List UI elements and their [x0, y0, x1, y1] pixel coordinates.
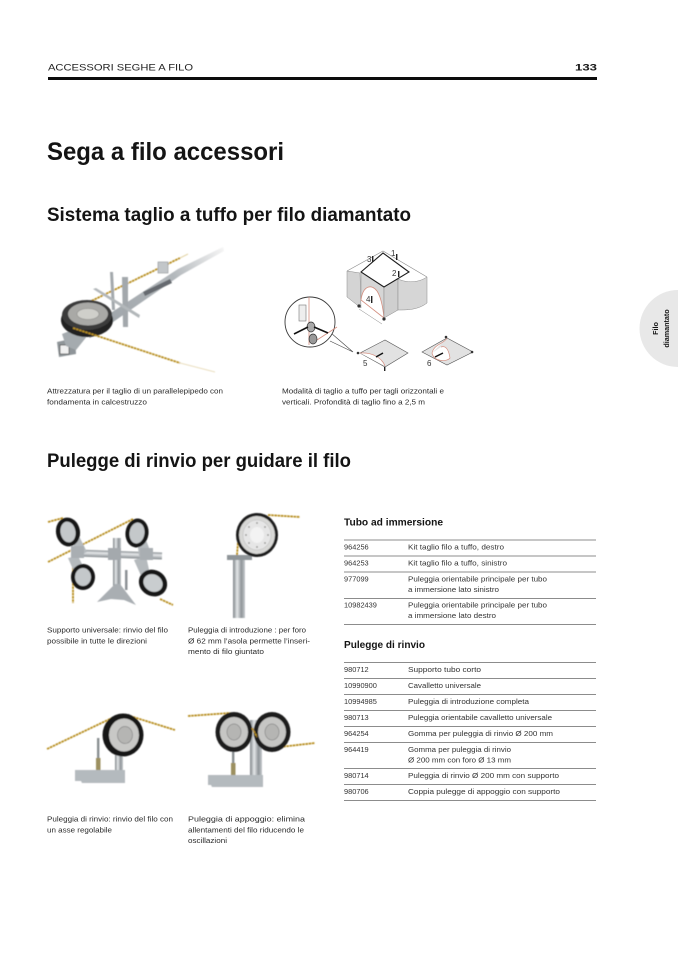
table: Pulegge di rinvio: 980714: [344, 771, 369, 780]
table: Tubo ad immersione: 964253: [344, 558, 369, 567]
table: Pulegge di rinvio: Puleggia di rinvio Ø 200 mm con supporto: [408, 771, 559, 780]
caption: support pulley pair: Puleggia di appoggio: elimina: [188, 815, 306, 824]
table heading: Pulegge di rinvio: Pulegge di rinvio: [344, 639, 425, 651]
detail circle: [285, 297, 353, 352]
table: Tubo ad immersione: 977099: [344, 574, 369, 583]
caption: introduction pulley: Puleggia di introduzione : per foro: [188, 626, 306, 635]
header rule: [48, 77, 597, 80]
caption: support pulley pair: oscillazioni: [188, 836, 227, 845]
side tab: Filo diamantato: Filo: [651, 322, 660, 335]
photo: support pulley pair: [188, 712, 315, 787]
table: Pulegge di rinvio: Gomma per puleggia di rinvio Ø 200 mm: [408, 729, 553, 738]
caption: deflection pulley: un asse regolabile: [47, 825, 112, 834]
block: [347, 251, 427, 324]
step numbers: 2: [392, 269, 397, 278]
side tab: Filo diamantato: [640, 290, 678, 367]
photo: introduction pulley: [227, 513, 300, 618]
caption: universal support: possibile in tutte le direzioni: [47, 636, 147, 645]
caption: universal support: [47, 626, 168, 645]
photo: plunge cut equipment: [57, 247, 224, 372]
diamond 6: 6: [427, 359, 432, 368]
title: Sega a filo accessori: [47, 138, 284, 166]
caption: introduction pulley: Ø 62 mm l’asola permette l’inseri-: [188, 636, 310, 645]
table: Pulegge di rinvio: Ø 200 mm con foro Ø 13 mm: [408, 755, 511, 764]
caption: equipment: fondamenta in calcestruzzo: [47, 398, 147, 407]
caption: universal support: Supporto universale: rinvio del filo: [47, 626, 168, 635]
table: Tubo ad immersione: Kit taglio filo a tuffo, sinistro: [408, 558, 507, 567]
diamond 6: [422, 336, 473, 368]
table: Pulegge di rinvio: [344, 662, 596, 800]
table: Tubo ad immersione: 10982439: [344, 601, 377, 610]
table: Tubo ad immersione: Puleggia orientabile principale per tubo: [408, 601, 547, 610]
caption: diagram: [282, 387, 444, 407]
page header: [48, 62, 597, 80]
table: Pulegge di rinvio: Coppia pulegge di appoggio con supporto: [408, 787, 560, 796]
table: Pulegge di rinvio: Supporto tubo corto: [408, 665, 481, 674]
caption: diagram: verticali. Profondità di taglio fino a 2,5 m: [282, 398, 425, 407]
heading: deflection pulleys: Pulegge di rinvio per guidare il filo: [47, 451, 351, 472]
caption: equipment: Attrezzatura per il taglio di un parallelepipedo con: [47, 387, 223, 396]
table: Pulegge di rinvio: 10990900: [344, 681, 377, 690]
table: Pulegge di rinvio: Puleggia di introduzione completa: [408, 697, 530, 706]
side tab: Filo diamantato: diamantato: [662, 309, 671, 348]
table: Pulegge di rinvio: 964419: [344, 745, 369, 754]
caption: support pulley pair: allentamenti del filo riducendo le: [188, 825, 304, 834]
table: Pulegge di rinvio: 980706: [344, 787, 369, 796]
diagram: plunge cut steps: [285, 249, 473, 371]
table: Pulegge di rinvio: Gomma per puleggia di rinvio: [408, 745, 511, 754]
photo: deflection pulley: [47, 714, 175, 783]
table: Pulegge di rinvio: 964254: [344, 729, 369, 738]
section label: ACCESSORI SEGHE A FILO: [48, 62, 193, 72]
step numbers: 4: [366, 295, 371, 304]
table: Tubo ad immersione: Kit taglio filo a tuffo, destro: [408, 542, 504, 551]
caption: introduction pulley: [188, 626, 310, 656]
diamond 5: [357, 340, 408, 371]
table: Pulegge di rinvio: 980713: [344, 713, 369, 722]
table: Pulegge di rinvio: Puleggia orientabile cavalletto universale: [408, 713, 552, 722]
heading: plunge cut system: Sistema taglio a tuffo per filo diamantato: [47, 205, 411, 226]
diamond 5: 5: [363, 359, 368, 368]
table heading: Tubo ad immersione: Tubo ad immersione: [344, 516, 443, 528]
table: Pulegge di rinvio: Cavalletto universale: [408, 681, 481, 690]
table: Pulegge di rinvio: 980712: [344, 665, 369, 674]
caption: support pulley pair: [188, 815, 306, 845]
table: Pulegge di rinvio: 10994985: [344, 697, 377, 706]
step numbers: 1: [391, 249, 396, 258]
table: Tubo ad immersione: a immersione lato destro: [408, 611, 496, 620]
table: Tubo ad immersione: Puleggia orientabile principale per tubo: [408, 574, 547, 583]
table: Tubo ad immersione: [344, 540, 596, 624]
caption: introduction pulley: mento di filo giuntato: [188, 647, 264, 656]
table: Tubo ad immersione: a immersione lato sinistro: [408, 585, 499, 594]
caption: equipment: [47, 387, 223, 407]
caption: deflection pulley: [47, 815, 173, 834]
table: Tubo ad immersione: 964256: [344, 542, 369, 551]
page number: 133: [575, 62, 597, 74]
caption: diagram: Modalità di taglio a tuffo per tagli orizzontali e: [282, 387, 444, 396]
step numbers: [366, 249, 399, 304]
caption: deflection pulley: Puleggia di rinvio: rinvio del filo con: [47, 815, 173, 824]
step numbers: 3: [367, 255, 372, 264]
photo: universal support: [48, 516, 173, 605]
